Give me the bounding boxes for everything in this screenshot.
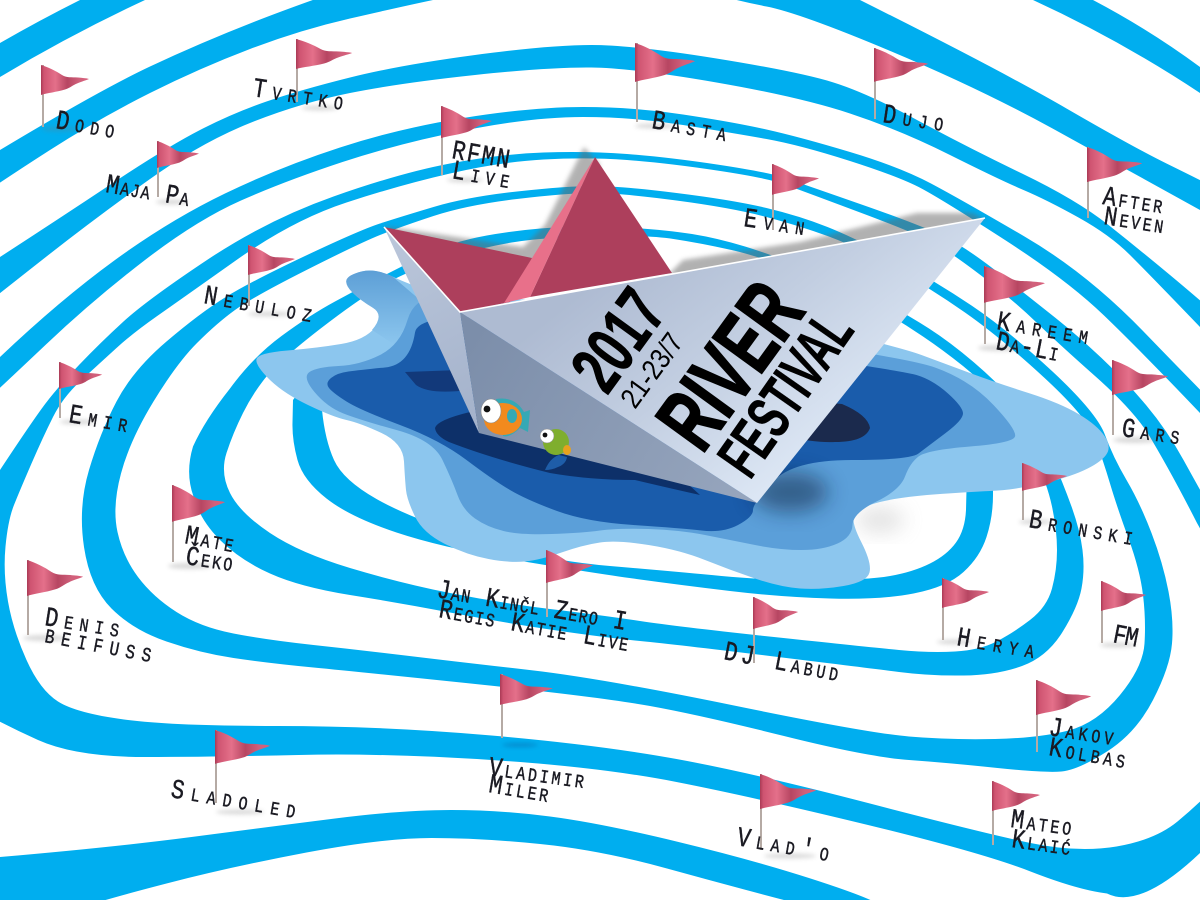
flag: Vlad'o: Vlad'o [734,823,831,870]
flag: Mate Ceko [168,485,236,580]
flag: Gars: Gars [1120,414,1182,453]
flag: Kareem Da-Li [978,266,1090,370]
flag: Sladoled: Sladoled [169,775,298,827]
flag: Mateo Klaic [992,781,1073,864]
flag: FM: FM [1110,620,1141,655]
flag: Sladoled [169,730,298,827]
sail: rear left [384,227,532,312]
flag: Evan: Evan [742,204,807,244]
flag: Vlad'o [734,774,831,870]
flag: Jakov Kolbas: Jakov [1047,713,1116,754]
puddle layer: medium blue [307,297,1015,550]
boat text: festival: FESTIVAL [705,299,867,489]
flag: Tvrtko [251,39,352,119]
flag: Vladimir Miler [487,674,586,811]
boat text: river: RIVER [637,264,822,466]
puddle layer: dark left [405,370,468,392]
flag: Jakov Kolbas: Kolbas [1047,733,1128,777]
flag: Nebuloz: Nebuloz [201,281,314,331]
flag: Vladimir Miler: Vladimir [487,753,586,797]
flag: Mate Ceko: Mate [182,521,236,561]
flag: Herya: Herya [955,623,1037,667]
hull: front panel [460,218,985,503]
flag: Dujo [874,48,946,140]
icon: green fish [540,429,571,470]
flag: Jan Kincl, Zero I, Regis, Katie Live [434,550,631,660]
flag: Evan [742,164,819,244]
flag: FM [1100,581,1146,655]
paper boat [384,157,985,503]
boat text: year: 2017 [556,275,680,405]
puddle layer: lightest [256,270,1109,589]
flag: Herya [937,578,1037,667]
hull: lower fold [460,312,757,503]
flag: After Neven: Neven [1102,202,1166,242]
puddle layer: dark under bow [435,412,700,495]
boat text: dates: 21-23/7 [615,327,690,414]
sail: main [530,157,672,297]
flag: Basta: Basta [649,106,729,150]
flag: Emir: Emir [66,400,130,441]
flag: Jan Kincl, Zero I, Regis, Katie Live: Regis Katie Live [436,595,631,660]
river band: top-left outer arc [0,0,145,77]
flag: Bronski [1019,463,1135,554]
boat cast shadows [383,147,985,280]
flag: Jan Kincl, Zero I, Regis, Katie Live: Jan Kinčl Zero I [434,575,629,639]
flag: Dujo: Dujo [881,100,946,140]
river band: fourth arc [0,107,1200,455]
flag: Nebuloz [201,245,314,331]
hull: white edge highlight [384,218,985,312]
flag: RFMN Live: RFMN [449,136,512,177]
shadow behind sails [383,147,600,270]
flag: Maja Pa [104,141,199,215]
flag: Denis Beifuss: BEIFUSS [43,627,153,669]
puddle of layered water [256,270,1109,589]
river band: second arc over the top [0,0,1200,230]
flag: RFMN Live [441,106,512,197]
flag: Gars [1112,360,1182,453]
icon: orange fish [481,399,530,436]
flag: Denis Beifuss [23,560,153,669]
puddle layer: deep blue [327,317,963,531]
river band: closed ring through Mate Ceko and Herya [189,227,1084,676]
river band: third arc [0,45,1200,365]
soft shadow on white beside the puddle [856,508,904,532]
puddle layer: darkest right pool [785,400,870,442]
river band: bottom outer arc [0,810,880,900]
flag: Emir [59,362,130,441]
flag: Tvrtko: Tvrtko [251,74,345,119]
boat shadow on the water [752,472,828,512]
shadow behind hull top edge [668,213,985,280]
river band: top-right outer arc [1033,0,1200,93]
flag: Jakov Kolbas [1036,680,1128,777]
flag: DJ Labud: DJ Labud [721,637,841,690]
flag: Vladimir Miler: Miler [487,770,551,811]
flag: DJ Labud [721,597,841,690]
flag: Mateo Klaic: Mateo [1009,805,1073,844]
flag: After Neven [1087,147,1166,242]
puddle left lobe shading [346,270,420,345]
flag: After Neven: After [1101,182,1165,222]
flag: RFMN Live: Live [449,156,512,197]
flag: Denis Beifuss: Denis [43,603,122,645]
flag: Bronski: Bronski [1026,505,1135,554]
flag: Mate Ceko: Čeko [184,540,235,580]
river band: closed ring through Denis and Kareem [82,186,1173,772]
hull: left panel [384,227,479,433]
sail: pink fold [504,157,595,303]
flag: Kareem Da-Li: Kareem [995,307,1090,353]
flag: Basta [635,43,729,150]
flag: Mateo Klaic: Klaić [1010,825,1072,864]
river band: innermost ring beneath the puddle [292,350,993,599]
flag: Dodo [41,65,117,147]
flag: Maja Pa: Maja Pa [104,170,192,215]
flag: Dodo: Dodo [53,106,117,147]
flag: Kareem Da-Li: Da-Li [993,327,1061,370]
